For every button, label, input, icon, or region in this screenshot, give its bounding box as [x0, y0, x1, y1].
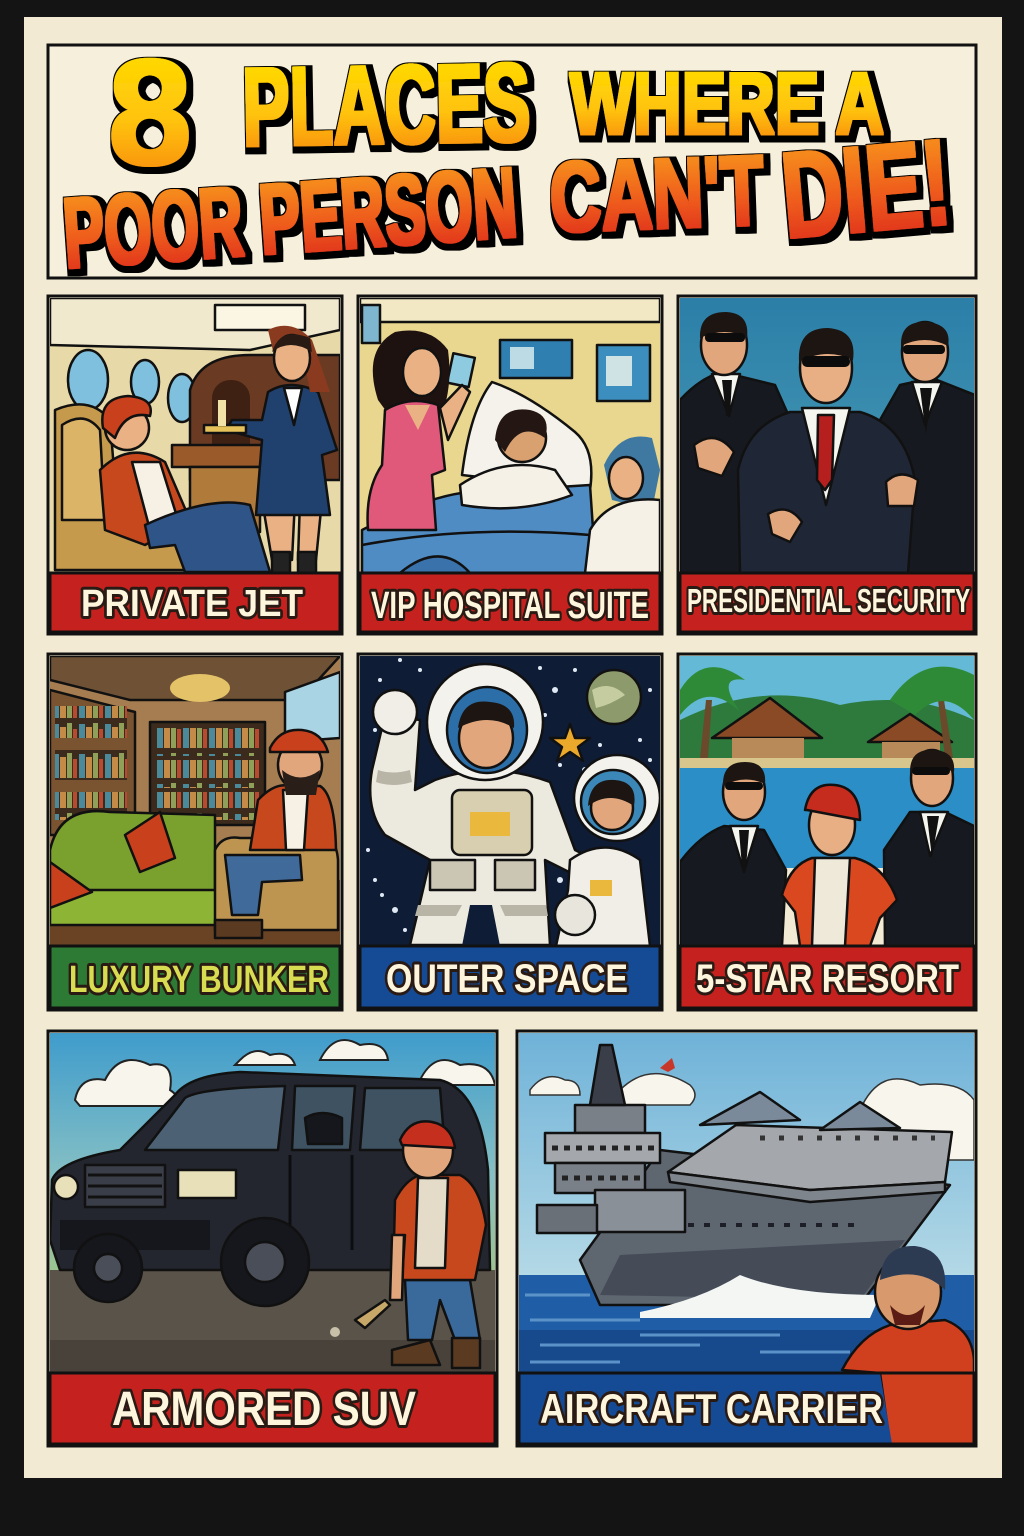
title line 2: POOR PERSON	[60, 147, 520, 290]
label bar	[360, 946, 660, 1008]
title line 1	[108, 28, 884, 196]
label bar	[50, 946, 340, 1008]
illustration: resort and guards	[680, 656, 974, 946]
panel: luxury bunker	[48, 654, 342, 1010]
label bar	[50, 573, 340, 632]
panel: presidential security	[678, 296, 976, 634]
label bar: ARMORED SUV	[112, 1383, 416, 1436]
title panel	[48, 28, 976, 290]
panel: armored suv	[48, 1031, 497, 1446]
illustration: jet cabin	[50, 298, 340, 573]
label bar	[360, 573, 660, 632]
panel: outer space	[358, 654, 662, 1010]
label bar: VIP HOSPITAL SUITE	[371, 585, 649, 627]
illustration: bunker interior	[50, 656, 340, 946]
illustration: three bodyguards	[680, 298, 975, 573]
label bar: AIRCRAFT CARRIER	[540, 1385, 883, 1432]
title line 1: WHERE A	[570, 54, 884, 153]
title line 2: CAN'T	[548, 135, 766, 254]
illustration: suv and man	[50, 1033, 495, 1373]
title line 1: 8	[108, 28, 192, 196]
label bar: 5-STAR RESORT	[696, 957, 959, 1001]
panel: aircraft carrier	[517, 1031, 976, 1446]
label bar	[50, 1373, 495, 1444]
label bar: LUXURY BUNKER	[69, 959, 329, 1001]
label bar	[680, 946, 974, 1008]
label bar	[519, 1373, 974, 1444]
title line 1: PLACES	[241, 40, 531, 170]
panel: 5-star resort	[678, 654, 976, 1010]
illustration: carrier at sea	[519, 1033, 974, 1444]
label bar: OUTER SPACE	[386, 957, 628, 1001]
label bar	[680, 573, 974, 632]
title line 2: DIE!	[776, 114, 956, 264]
panel: vip hospital suite	[358, 296, 662, 634]
illustration: astronauts	[360, 656, 660, 946]
panel: private jet	[48, 296, 342, 634]
label bar: PRIVATE JET	[81, 583, 303, 625]
illustration: hospital room	[360, 298, 660, 573]
